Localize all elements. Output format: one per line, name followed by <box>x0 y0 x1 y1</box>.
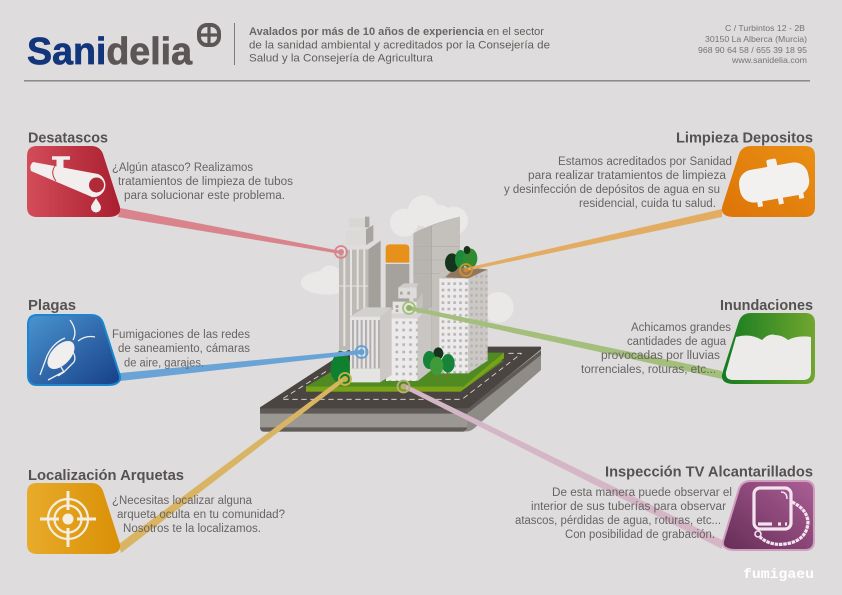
clouds <box>301 195 514 323</box>
central building <box>386 283 432 381</box>
heading: Inspección TV Alcantarillados <box>605 464 813 480</box>
connector: limpieza depositos <box>466 209 722 271</box>
connector: plagas <box>120 350 361 381</box>
marker: green <box>403 302 415 314</box>
trees on roof <box>445 246 477 272</box>
description: Nosotros te la localizamos. <box>123 523 261 535</box>
description: Achicamos grandes <box>631 322 731 334</box>
description <box>112 162 293 202</box>
connector: desatascos <box>118 208 341 254</box>
white tower right <box>439 267 488 373</box>
markers <box>335 246 472 392</box>
contact details: 968 90 64 58 / 655 39 18 95 <box>698 45 807 55</box>
description: arqueta oculta en tu comunidad? <box>117 509 285 521</box>
description: residencial, cuida tu salud. <box>579 198 716 210</box>
heading: Inundaciones <box>720 297 813 314</box>
panel: localizacion arquetas <box>27 467 285 554</box>
description <box>504 156 732 210</box>
description: ¿Necesitas localizar alguna <box>112 495 253 507</box>
icon panel: tv camera <box>723 481 814 550</box>
panel: desatascos <box>27 130 293 217</box>
icon: logo cross <box>199 25 219 45</box>
contact details: 30150 La Alberca (Murcia) <box>705 34 807 44</box>
description: para solucionar este problema. <box>124 190 285 202</box>
icon panel: tank <box>722 146 815 217</box>
description: interior de sus tuberías para observar <box>531 501 726 513</box>
connector: inspeccion <box>403 384 722 549</box>
header tagline: Avalados por más de 10 años de experiencia en el sector <box>249 26 544 38</box>
panel: inspeccion tv <box>515 464 814 550</box>
description: de saneamiento, cámaras <box>118 343 250 355</box>
header tagline: Salud y la Consejería de Agricultura <box>249 52 434 64</box>
description <box>112 495 285 535</box>
description: Estamos acreditados por Sanidad <box>558 156 732 168</box>
logo: Sanidelia <box>27 31 193 73</box>
contact details: www.sanidelia.com <box>731 55 807 65</box>
marker: blue <box>356 346 368 358</box>
marker: red <box>335 246 347 258</box>
marker: yellow <box>339 373 351 385</box>
trees <box>331 347 455 383</box>
description: y desinfección de depósitos de agua en su <box>504 184 720 196</box>
connector: localizacion <box>119 377 346 553</box>
header tagline: de la sanidad ambiental y acreditados por la Consejería de <box>249 40 550 52</box>
description: De esta manera puede observar el <box>552 487 732 499</box>
city illustration <box>260 195 541 432</box>
contact details <box>698 23 807 65</box>
contact details: C / Turbintos 12 - 2B <box>725 23 805 33</box>
description: cantidades de agua <box>627 336 727 348</box>
marker: mauve <box>398 380 410 392</box>
heading: Limpieza Depositos <box>676 130 813 146</box>
description: torrenciales, roturas, etc... <box>581 364 716 376</box>
platform <box>260 347 541 432</box>
slab tower <box>413 217 460 353</box>
description: para realizar tratamientos de limpieza <box>528 170 727 182</box>
heading: Desatascos <box>28 130 108 146</box>
heading: Plagas <box>28 297 76 314</box>
panel: limpieza depositos <box>504 130 815 217</box>
tall grey tower <box>339 217 381 350</box>
icon panel: cockroach <box>28 315 120 385</box>
description: de aire, garajes. <box>124 358 204 370</box>
icon panel: target <box>27 483 120 554</box>
striped building left <box>350 307 392 382</box>
marker: orange <box>460 264 472 276</box>
panel: plagas <box>28 297 250 385</box>
description: Con posibilidad de grabación. <box>565 529 715 541</box>
panel: inundaciones <box>581 297 815 384</box>
heading: Localización Arquetas <box>28 467 184 484</box>
description <box>581 322 731 376</box>
description: Fumigaciones de las redes <box>112 329 250 341</box>
connector: inundaciones <box>409 306 722 379</box>
icon panel: pipe <box>27 146 120 217</box>
description: ¿Algún atasco? Realizamos <box>112 162 253 174</box>
description: tratamientos de limpieza de tubos <box>118 176 293 188</box>
description: atascos, pérdidas de agua, roturas, etc... <box>515 515 721 527</box>
description <box>112 329 250 370</box>
icon panel: flood <box>722 313 815 384</box>
orange-topped tower <box>386 244 409 310</box>
header tagline <box>249 26 550 64</box>
description: provocadas por lluvias <box>601 350 720 362</box>
description <box>515 487 732 541</box>
watermark: fumigaeu <box>743 567 814 583</box>
